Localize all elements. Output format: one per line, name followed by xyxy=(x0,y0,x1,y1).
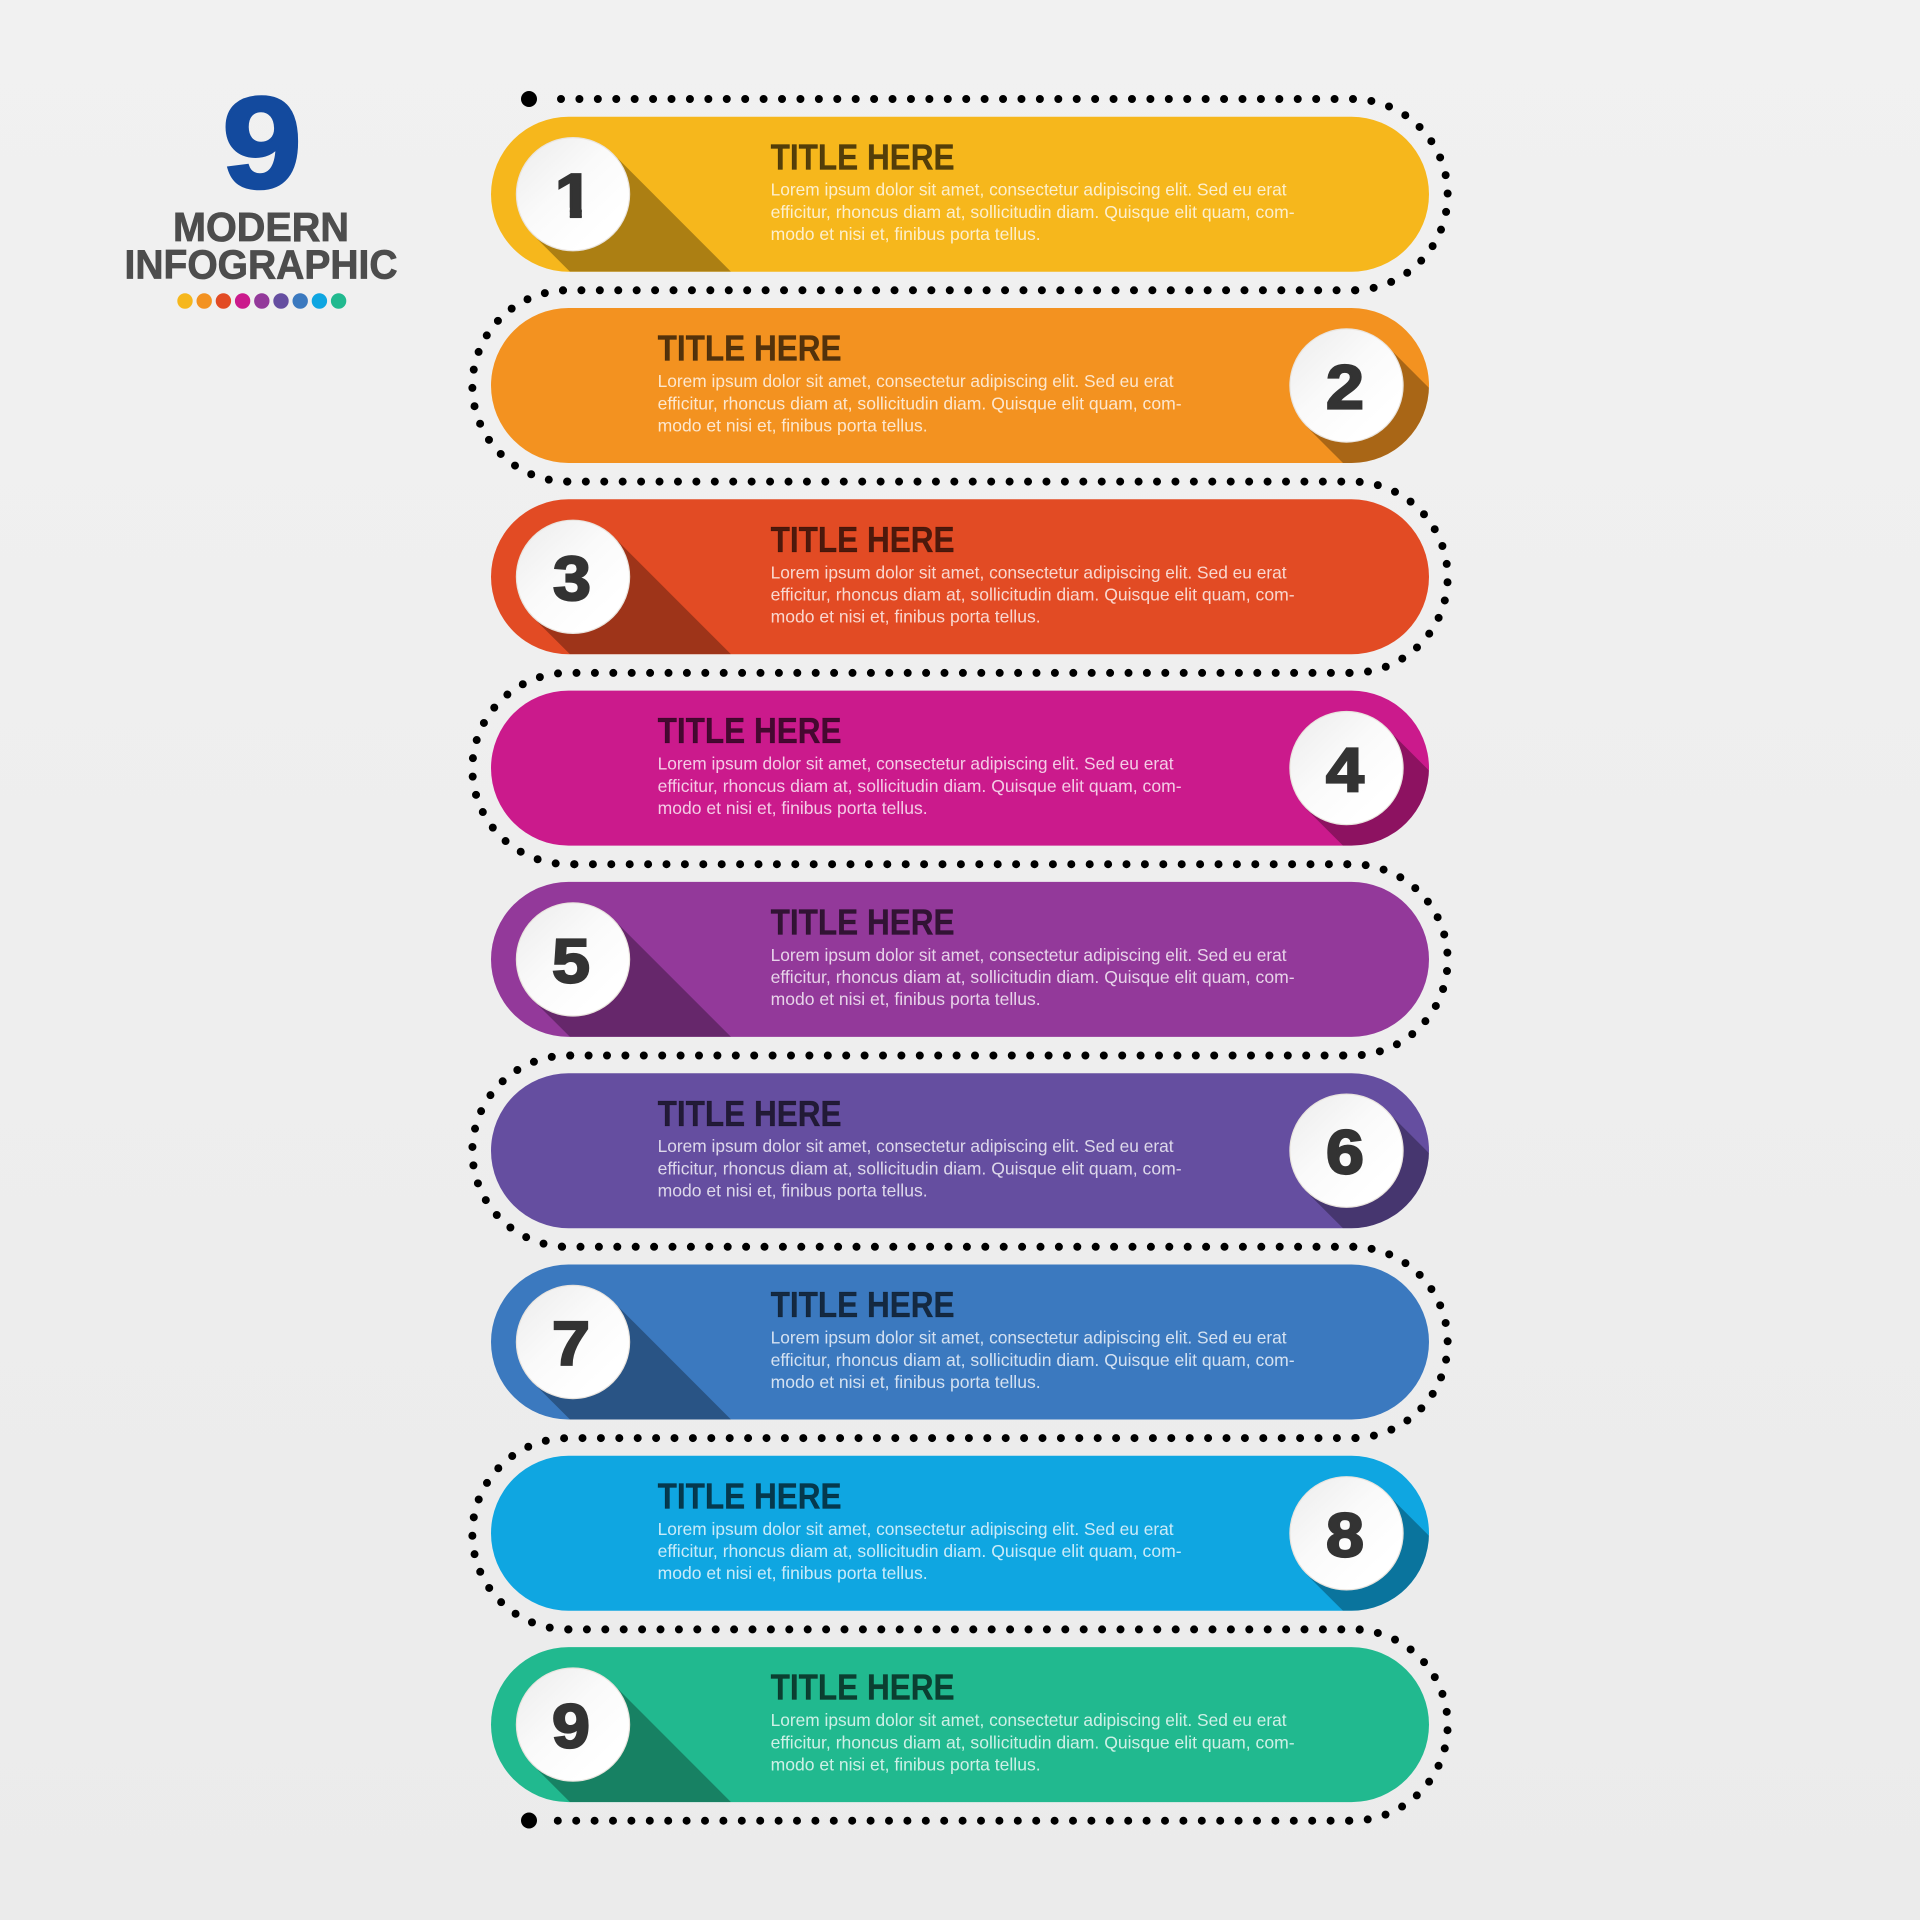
number disc xyxy=(516,520,630,633)
number: 4 xyxy=(1326,735,1364,804)
panel: step 7 xyxy=(491,1264,1429,1420)
pill xyxy=(491,691,1429,846)
body text xyxy=(771,180,1295,244)
long shadow xyxy=(533,919,731,1037)
pill xyxy=(491,1264,1429,1420)
body text: modo et nisi et, finibus porta tellus. xyxy=(771,607,1041,627)
number: 5 xyxy=(552,926,590,996)
number: 6 xyxy=(1326,1118,1364,1187)
body text: efficitur, rhoncus diam at, sollicitudin diam. Quisque elit quam, com- xyxy=(771,967,1295,987)
number disc xyxy=(1290,1094,1403,1207)
body text: efficitur, rhoncus diam at, sollicitudin diam. Quisque elit quam, com- xyxy=(658,1158,1182,1178)
body text: Lorem ipsum dolor sit amet, consectetur adipiscing elit. Sed eu erat xyxy=(771,1710,1287,1730)
number: 3 xyxy=(553,544,591,613)
body text: modo et nisi et, finibus porta tellus. xyxy=(771,989,1041,1009)
heading: modern: MODERN xyxy=(173,204,349,250)
body text xyxy=(658,371,1182,435)
body text xyxy=(771,562,1295,627)
body text xyxy=(658,1136,1182,1200)
long shadow xyxy=(533,1684,731,1802)
title: TITLE HERE xyxy=(771,519,955,560)
body text: modo et nisi et, finibus porta tellus. xyxy=(658,798,928,818)
title: TITLE HERE xyxy=(658,1093,842,1134)
body text xyxy=(771,945,1295,1009)
long shadow xyxy=(533,154,731,272)
number: 8 xyxy=(1326,1500,1364,1570)
body text: modo et nisi et, finibus porta tellus. xyxy=(771,1372,1041,1392)
number disc xyxy=(516,138,630,251)
body text: Lorem ipsum dolor sit amet, consectetur adipiscing elit. Sed eu erat xyxy=(658,1519,1174,1539)
pill xyxy=(491,117,1429,272)
number: 7 xyxy=(552,1309,590,1378)
number disc xyxy=(1290,329,1403,442)
body text: efficitur, rhoncus diam at, sollicitudin diam. Quisque elit quam, com- xyxy=(771,1732,1295,1752)
pill xyxy=(491,1647,1429,1802)
number disc xyxy=(516,903,630,1016)
long shadow xyxy=(1306,1498,1429,1611)
panel: step 6 xyxy=(491,1073,1504,1228)
title: TITLE HERE xyxy=(771,1667,955,1708)
long shadow xyxy=(1306,350,1429,463)
title: TITLE HERE xyxy=(771,902,955,943)
dotted serpentine connector xyxy=(472,91,1448,1828)
pill xyxy=(491,1073,1429,1228)
body text: efficitur, rhoncus diam at, sollicitudin diam. Quisque elit quam, com- xyxy=(771,1350,1295,1370)
pill xyxy=(491,882,1429,1037)
body text: modo et nisi et, finibus porta tellus. xyxy=(771,224,1041,244)
long shadow xyxy=(533,1302,731,1420)
panel: step 1 xyxy=(491,117,1429,272)
number: 9 xyxy=(552,1691,590,1761)
long shadow xyxy=(1306,733,1429,846)
number disc xyxy=(1290,712,1403,825)
header: 9 modern infographic xyxy=(124,70,398,309)
body text xyxy=(771,1710,1295,1774)
body text: modo et nisi et, finibus porta tellus. xyxy=(658,1180,928,1200)
dotted path xyxy=(472,99,1448,1821)
body text: Lorem ipsum dolor sit amet, consectetur adipiscing elit. Sed eu erat xyxy=(658,754,1174,774)
long shadow xyxy=(1306,1116,1429,1228)
body text xyxy=(771,1328,1295,1392)
end dot xyxy=(521,1812,537,1828)
title: TITLE HERE xyxy=(771,1284,955,1325)
number: 1 xyxy=(555,161,593,231)
body text: efficitur, rhoncus diam at, sollicitudin diam. Quisque elit quam, com- xyxy=(658,1541,1182,1561)
panel: step 4 xyxy=(491,691,1504,846)
body text: modo et nisi et, finibus porta tellus. xyxy=(771,1754,1041,1774)
body text: Lorem ipsum dolor sit amet, consectetur adipiscing elit. Sed eu erat xyxy=(771,180,1287,200)
number disc xyxy=(1290,1477,1403,1590)
pill xyxy=(491,308,1429,463)
heading: infographic: INFOGRAPHIC xyxy=(124,241,398,287)
number disc xyxy=(516,1285,630,1399)
big number 9: 9 xyxy=(222,70,302,215)
body text: Lorem ipsum dolor sit amet, consectetur adipiscing elit. Sed eu erat xyxy=(771,1328,1287,1348)
colour dots legend xyxy=(177,293,346,309)
panel: step 8 xyxy=(491,1456,1504,1611)
body text: Lorem ipsum dolor sit amet, consectetur adipiscing elit. Sed eu erat xyxy=(658,371,1174,391)
body text: efficitur, rhoncus diam at, sollicitudin diam. Quisque elit quam, com- xyxy=(658,776,1182,796)
panel: step 3 xyxy=(491,499,1429,654)
pill xyxy=(491,1456,1429,1611)
panel: step 2 xyxy=(491,308,1504,463)
pill xyxy=(491,499,1429,654)
panel: step 9 xyxy=(491,1647,1429,1802)
body text: efficitur, rhoncus diam at, sollicitudin diam. Quisque elit quam, com- xyxy=(658,393,1182,413)
long shadow xyxy=(533,536,731,654)
body text: Lorem ipsum dolor sit amet, consectetur adipiscing elit. Sed eu erat xyxy=(771,945,1287,965)
title: TITLE HERE xyxy=(658,328,842,369)
panel: step 5 xyxy=(491,882,1429,1037)
title: TITLE HERE xyxy=(658,1475,842,1516)
body text xyxy=(658,754,1182,818)
body text: modo et nisi et, finibus porta tellus. xyxy=(658,415,928,435)
body text: Lorem ipsum dolor sit amet, consectetur adipiscing elit. Sed eu erat xyxy=(658,1136,1174,1156)
body text: modo et nisi et, finibus porta tellus. xyxy=(658,1563,928,1583)
body text: efficitur, rhoncus diam at, sollicitudin diam. Quisque elit quam, com- xyxy=(771,202,1295,222)
body text xyxy=(658,1519,1182,1583)
number: 2 xyxy=(1326,352,1364,422)
title: TITLE HERE xyxy=(771,136,955,177)
number disc xyxy=(516,1668,630,1781)
title: TITLE HERE xyxy=(658,710,842,751)
body text: Lorem ipsum dolor sit amet, consectetur adipiscing elit. Sed eu erat xyxy=(771,562,1287,582)
body text: efficitur, rhoncus diam at, sollicitudin diam. Quisque elit quam, com- xyxy=(771,585,1295,605)
start dot xyxy=(521,91,537,107)
